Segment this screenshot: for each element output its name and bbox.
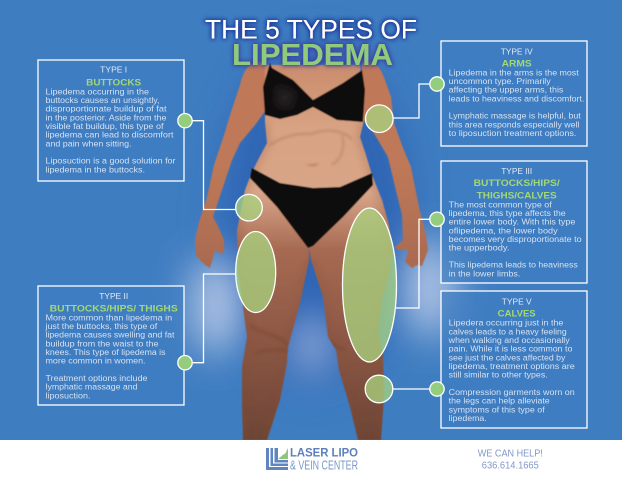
- panel: type II: knees. This type of lipedema is: [46, 348, 166, 357]
- panel: type I: and pain when sitting.: [46, 139, 132, 148]
- footer band: [0, 440, 622, 481]
- skin shading: [238, 122, 389, 352]
- panel: type V: CALVES: [498, 309, 536, 320]
- panel: type V: symptoms of this type of: [449, 405, 546, 414]
- contact: WE CAN HELP!: [478, 449, 543, 460]
- panel: type III: lipedema, this type affects the: [449, 209, 566, 218]
- panel: type V: see just the calves affected by: [449, 353, 565, 362]
- panel: type I: disproportionate buildup of fat: [46, 105, 167, 114]
- zones on the body: [236, 105, 396, 403]
- panel: type I: visible fat buildup, this type of: [46, 122, 164, 131]
- panel: type II: more common in women.: [46, 357, 146, 366]
- panel: type II: BUTTOCKS/HIPS/ THIGHS: [50, 304, 178, 315]
- title line two: LIPEDEMA: [232, 37, 393, 72]
- panel: type II: lymphatic massage and: [46, 383, 138, 392]
- panel: type II: just the buttocks, this type of: [44, 322, 158, 331]
- panel: type IV: affecting the upper arms, this: [449, 86, 563, 95]
- zone: type IV arm: [366, 105, 393, 132]
- panel: type I: Liposuction is a good solution for: [46, 157, 176, 166]
- zone: type V calf: [365, 375, 393, 403]
- icon: logo mark: [266, 448, 288, 470]
- panel: type III: the upperbody.: [449, 243, 509, 252]
- panel: type III: BUTTOCKS/HIPS/: [474, 178, 560, 189]
- panel: type V: lipedema.: [449, 414, 487, 423]
- panel: type V: [430, 291, 587, 428]
- panel: type II: liposuction.: [46, 391, 90, 400]
- panel: type I: [38, 60, 192, 181]
- bra sheen: [276, 85, 296, 108]
- panel: type I: lipedema can lead to discomfort: [46, 131, 174, 140]
- panel: type III: oflipedema, the lower body: [449, 226, 558, 235]
- panel: type II: Treatment options include: [46, 374, 148, 383]
- panel: type V: the legs can help alleviate: [449, 397, 550, 406]
- connectors: [185, 84, 437, 389]
- panel: type IV: to liposuction treatment options.: [449, 129, 576, 138]
- logo: Laser Lipo & Vein Center: [266, 446, 358, 472]
- panel: type IV: leads to heaviness and discomfort.: [449, 94, 584, 103]
- panel: type I: in the posterior. Aside from the: [46, 113, 167, 122]
- zone: type III leg: [342, 208, 396, 362]
- panel: type II: TYPE II: [99, 291, 128, 301]
- panel: type IV: ARMS: [502, 59, 532, 70]
- zone: type II thigh: [236, 232, 276, 312]
- panel: type IV: TYPE IV: [501, 46, 533, 56]
- panel: type II: buildup from the waist to the: [46, 339, 159, 348]
- panel: type III: entire lower body. With this type: [449, 218, 576, 227]
- panel: type V: calves leads to a heavy feeling: [449, 327, 567, 336]
- panel: type IV: Lipedema in the arms is the most: [449, 68, 580, 77]
- logo subtitle: & VEIN CENTER: [290, 457, 358, 472]
- photo: woman in black underwear: [195, 62, 428, 440]
- panel: type III: in the lower limbs.: [449, 269, 520, 278]
- panel: type III: THIGHS/CALVES: [477, 191, 557, 202]
- panel: type II: lipedema causes swelling and fat: [46, 331, 175, 340]
- panel: type IV: [430, 41, 587, 146]
- zone: type I buttocks: [236, 194, 262, 221]
- logo name: LASER LIPO: [290, 446, 358, 460]
- panel: type I: buttocks causes an unsightly,: [46, 96, 160, 105]
- panel: type V: Lipedera occurring just in the: [449, 319, 564, 328]
- panel: type V: pain. While it is less common to: [449, 345, 573, 354]
- panel: type III: becomes very disproportionate to: [449, 235, 582, 244]
- panel: type IV: uncommon type. Primarily: [449, 77, 551, 86]
- panel: type III: This lipedema leads to heaviness: [449, 261, 578, 270]
- contact: 636.614.1665: [482, 461, 539, 472]
- panel: type I: BUTTOCKS: [86, 77, 141, 88]
- panel: type III: The most common type of: [449, 200, 553, 209]
- panel: type V: when walking and occasionally: [448, 336, 570, 345]
- panel: type I: TYPE I: [100, 65, 127, 75]
- panel: type I: lipedema in the buttocks.: [46, 165, 145, 174]
- left arm: [195, 62, 270, 268]
- panel: type III: TYPE III: [501, 166, 532, 176]
- panel: type I: Lipedema occurring in the: [46, 87, 150, 96]
- title line one: THE 5 TYPES OF: [205, 14, 417, 44]
- panel: type II: [38, 286, 192, 405]
- panel: type IV: this area responds especially well: [449, 120, 580, 129]
- contact: [478, 449, 543, 472]
- panel: type III: [430, 161, 587, 283]
- panel: type V: Compression garments worn on: [449, 388, 575, 397]
- title: [205, 14, 417, 72]
- panel: type IV: Lymphatic massage is helpful, but: [449, 112, 582, 121]
- right arm: [362, 62, 428, 268]
- panel: type II: More common than lipedema in: [46, 313, 172, 322]
- panel: type V: TYPE V: [502, 296, 532, 306]
- underwear: [250, 168, 373, 248]
- panel: type V: still similar to other types.: [449, 371, 548, 380]
- bra: [263, 63, 365, 122]
- torso and legs: [237, 65, 392, 440]
- panel: type V: lipedema, treatment options are: [449, 362, 575, 371]
